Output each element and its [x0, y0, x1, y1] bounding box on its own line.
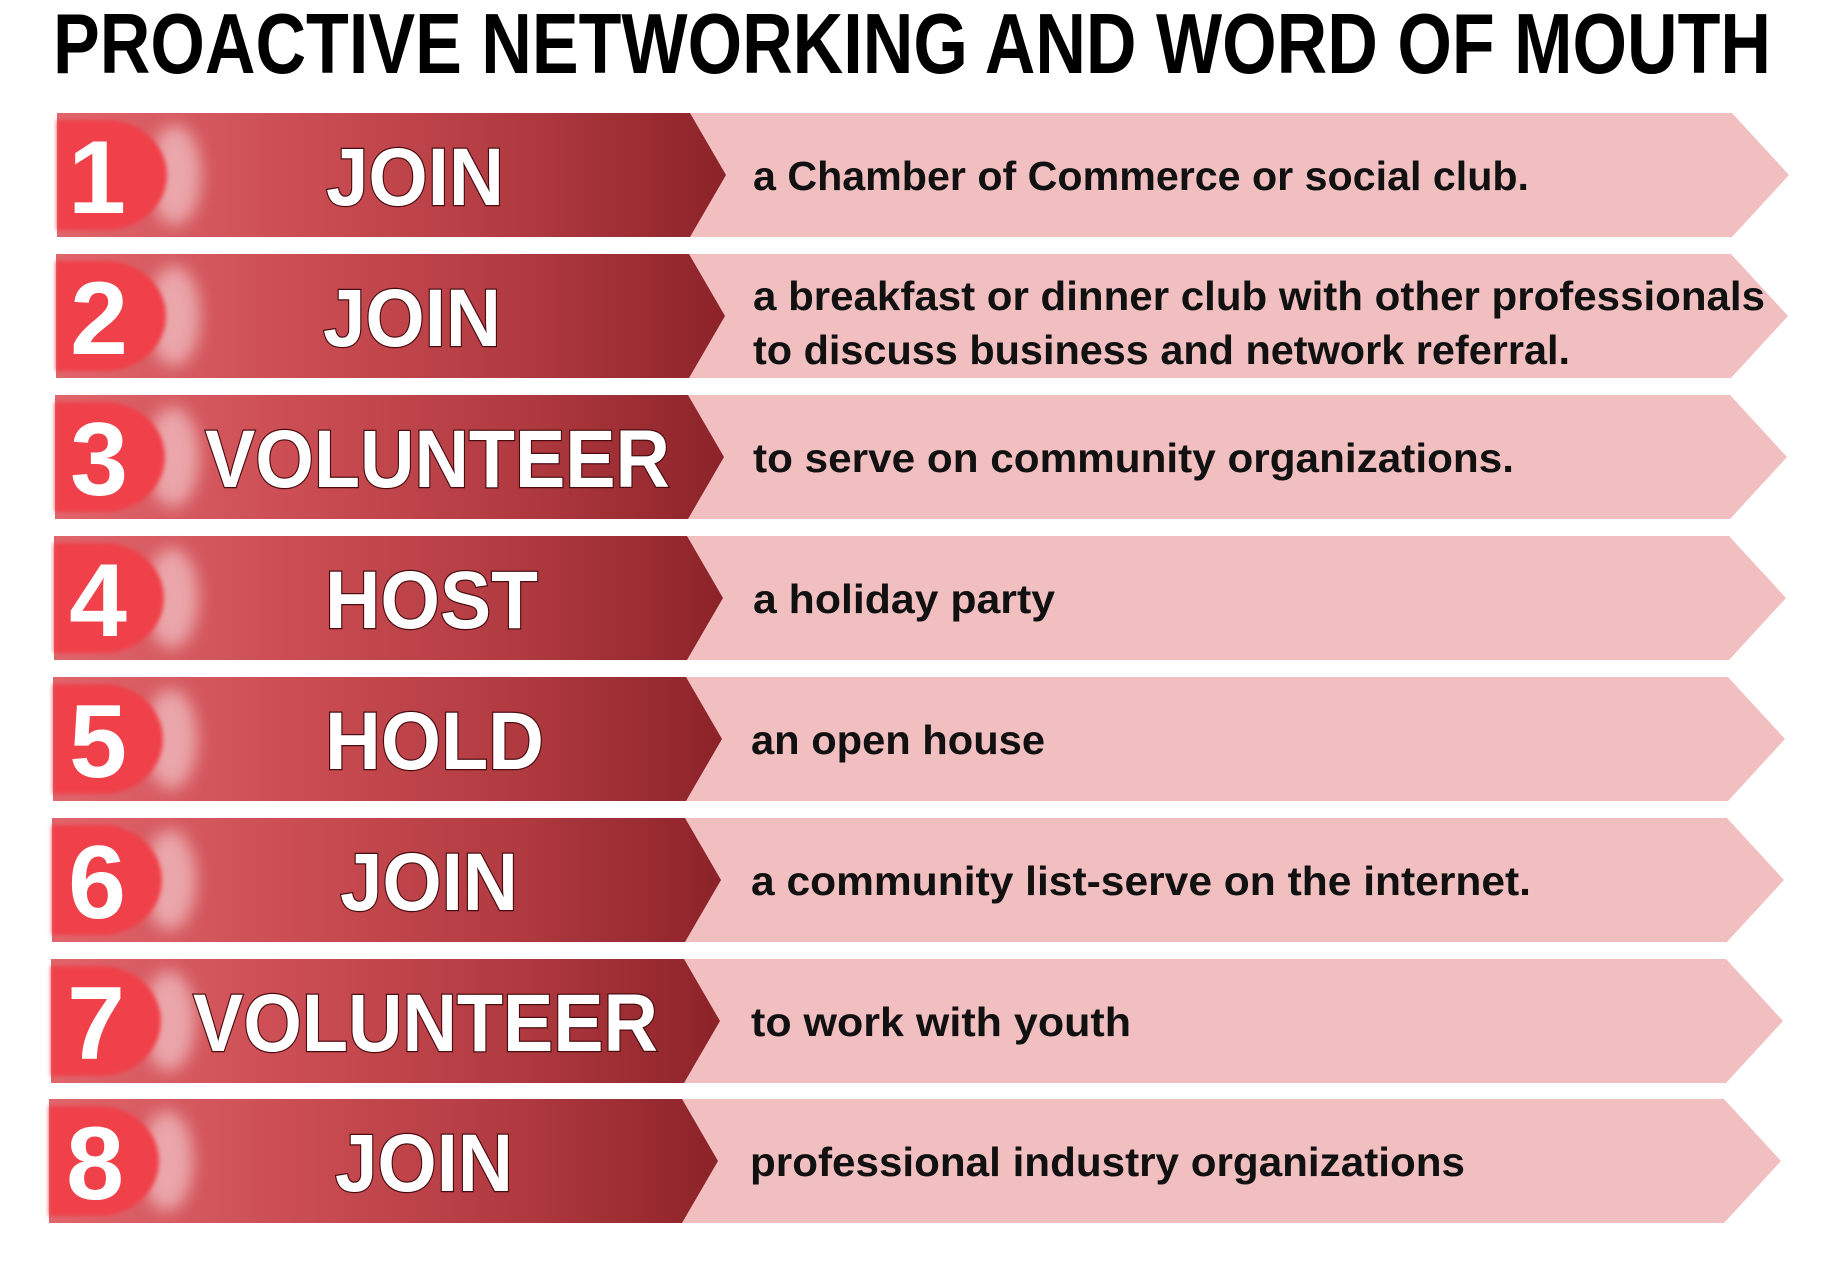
row 8: JOIN [335, 1118, 513, 1209]
row 2: a breakfast or dinner club with other professionals [753, 273, 1765, 319]
row 1 [57, 113, 1789, 237]
row 7 [51, 959, 1783, 1083]
row 2: JOIN [323, 273, 501, 364]
row 8: 8 [66, 1106, 124, 1222]
row 6: JOIN [340, 837, 518, 928]
row 6: 6 [68, 825, 126, 941]
row 2: to discuss business and network referral. [753, 327, 1570, 373]
row 8 [49, 1099, 1781, 1223]
row 4: a holiday party [753, 576, 1055, 622]
row 1: a Chamber of Commerce or social club. [753, 153, 1529, 199]
row 1: 1 [68, 120, 126, 236]
row 2: 2 [70, 261, 128, 377]
row 7: to work with youth [751, 999, 1131, 1045]
row 3: 3 [70, 402, 128, 518]
row 7: VOLUNTEER [193, 978, 658, 1069]
row 3 [55, 395, 1787, 519]
row 4 [54, 536, 1786, 660]
row 5: HOLD [325, 696, 544, 787]
row 2 [56, 254, 1788, 378]
row 4: 4 [69, 543, 127, 659]
row 5: an open house [751, 717, 1045, 763]
row 8: professional industry organizations [750, 1139, 1465, 1185]
row 5 [53, 677, 1785, 801]
row 4: HOST [325, 555, 538, 646]
row 6: a community list-serve on the internet. [751, 858, 1531, 904]
row 1: JOIN [326, 132, 504, 223]
row 3: VOLUNTEER [205, 414, 670, 505]
row 3: to serve on community organizations. [753, 435, 1514, 481]
row 5: 5 [69, 684, 127, 800]
row 7: 7 [67, 966, 125, 1082]
row 6 [52, 818, 1784, 942]
